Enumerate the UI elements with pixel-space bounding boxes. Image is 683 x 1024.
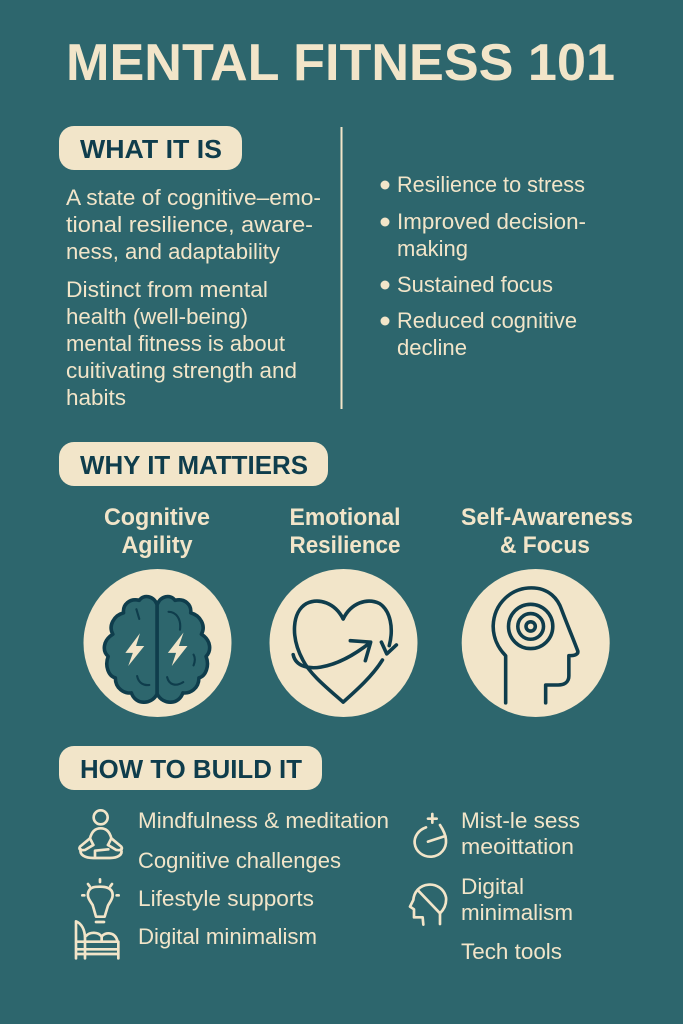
text block: distinction from mental health: health (well-being) <box>66 304 248 329</box>
heading: how to build it: HOW TO BUILD IT <box>80 754 302 784</box>
benefits list <box>380 172 586 360</box>
item: digital minimalism: Digital minimalism <box>138 924 317 949</box>
bullet: reduced cognitive decline <box>380 308 577 360</box>
heading: what it is <box>59 126 242 170</box>
item: lifestyle supports: Lifestyle supports <box>138 886 314 911</box>
icon: brain with lightning bolts <box>84 569 232 717</box>
column: emotional resilience <box>270 504 418 717</box>
label: self-awareness and focus: & Focus <box>500 532 590 559</box>
item: mist-le sess meoittation: Mist-le sess <box>461 808 580 833</box>
icon: light bulb <box>82 879 119 922</box>
bullet: improved decision-making: making <box>397 236 468 261</box>
bullet: reduced cognitive decline: decline <box>397 335 467 360</box>
icon: head with slash <box>410 885 446 925</box>
item: mindfulness and meditation: Mindfulness & meditation <box>138 808 389 833</box>
bullet: resilience to stress: Resilience to stress <box>397 172 585 197</box>
item: digital minimalism: minimalism <box>461 900 573 925</box>
icon: timer with plus <box>415 814 446 857</box>
heading: why it matters <box>59 442 328 486</box>
icon: heart with arrows <box>270 569 418 717</box>
text block: distinction from mental health: Distinct from mental <box>66 277 268 302</box>
label: self-awareness and focus: Self-Awareness <box>461 504 633 531</box>
label: cognitive agility: Agility <box>122 532 193 559</box>
heading: what it is: WHAT IT IS <box>80 134 222 164</box>
heading: how to build it <box>59 746 322 790</box>
icon: head with target <box>462 569 610 717</box>
list: how to build, right column <box>461 808 580 964</box>
bullet: improved decision-making: Improved decision- <box>397 209 586 234</box>
bullet: reduced cognitive decline: Reduced cognitive <box>397 308 577 333</box>
item: mist-le sess meoittation: meoittation <box>461 834 574 859</box>
text block: distinction from mental health: cuitivating strength and <box>66 358 297 383</box>
bullet: sustained focus: Sustained focus <box>397 272 553 297</box>
panel: what it is <box>59 126 327 410</box>
title: MENTAL FITNESS 101 <box>66 34 615 92</box>
text block: distinction from mental health: mental fitness is about <box>66 331 285 356</box>
bullet: improved decision-making <box>380 209 586 261</box>
icon: meditating person <box>79 810 122 858</box>
item: tech tools: Tech tools <box>461 939 562 964</box>
label: emotional resilience: Resilience <box>290 532 400 559</box>
item: digital minimalism: Digital <box>461 874 524 899</box>
item: cognitive challenges: Cognitive challenges <box>138 848 341 873</box>
label: cognitive agility: Cognitive <box>104 504 210 531</box>
text block: definition: A state of cognitive–emo- <box>66 185 321 210</box>
list: how to build, left column <box>138 808 389 949</box>
text block: distinction from mental health: habits <box>66 385 126 410</box>
heading: why it matters: WHY IT MATTIERS <box>80 450 308 480</box>
icon: bed <box>76 921 118 958</box>
column: cognitive agility <box>84 504 232 717</box>
column: self-awareness and focus <box>461 504 633 717</box>
label: emotional resilience: Emotional <box>290 504 400 531</box>
text block: definition: tional resilience, aware- <box>66 212 313 237</box>
text block: definition: ness, and adaptability <box>66 239 280 264</box>
